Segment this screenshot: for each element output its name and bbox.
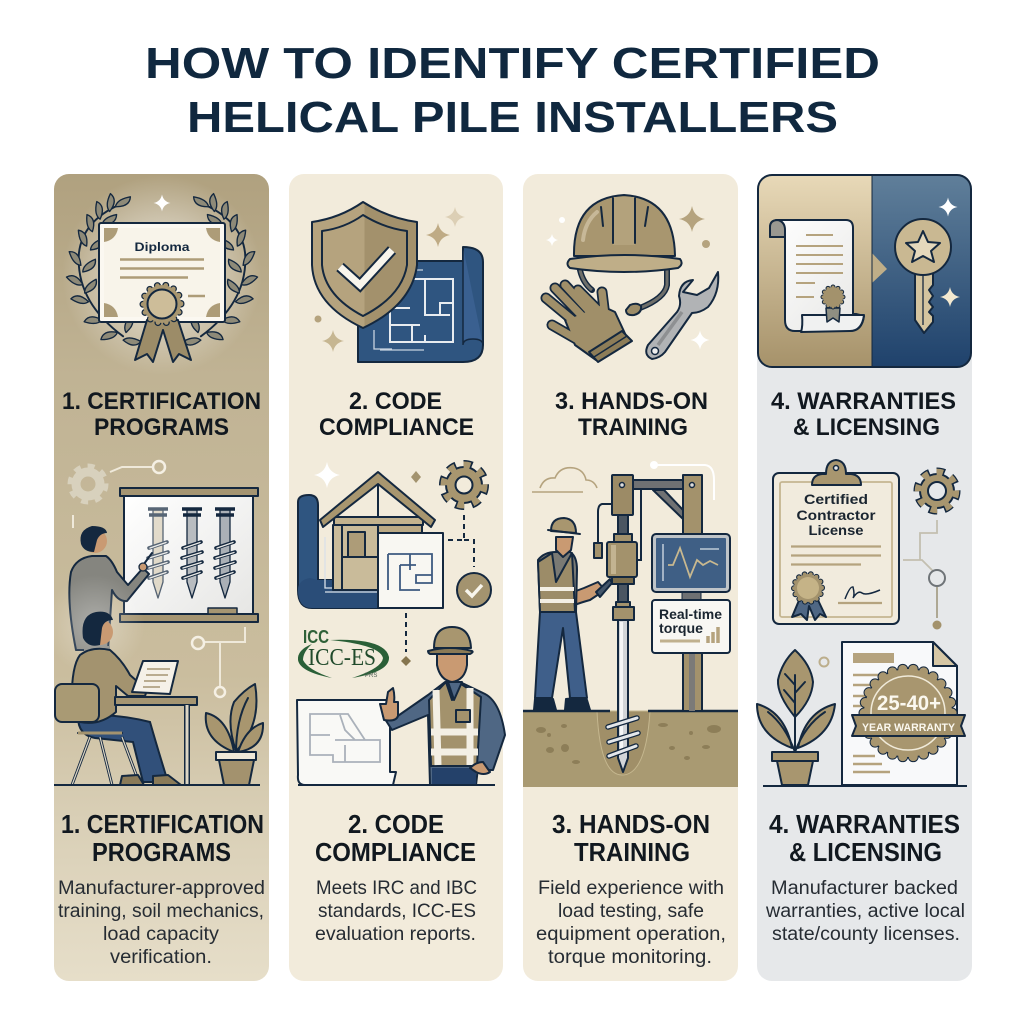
text: warranties description: Manufacturer backed xyxy=(771,878,958,899)
text: hands-on description: Field experience with xyxy=(538,878,724,899)
title: HOW TO IDENTIFY CERTIFIED xyxy=(145,39,880,88)
ground line xyxy=(54,784,260,786)
certified contractor license clipboard: License xyxy=(808,523,864,538)
ICC-ES logo: ICC-ES xyxy=(308,645,376,671)
heading: code bottom: COMPLIANCE xyxy=(315,837,476,867)
heading: code bottom: 2. CODE xyxy=(348,809,444,839)
text: hands-on description: equipment operation, xyxy=(536,924,726,945)
heading: code top xyxy=(319,388,474,441)
worker with controller xyxy=(534,518,612,710)
text: warranties description: state/county licenses. xyxy=(772,924,960,945)
panel: code compliance xyxy=(289,174,505,981)
heading: hands-on bottom xyxy=(552,809,710,867)
instructor figure xyxy=(69,526,152,660)
heading: code top: COMPLIANCE xyxy=(319,414,474,441)
title xyxy=(145,39,880,142)
icon: diploma with laurel wreath xyxy=(62,175,262,375)
pile: tan xyxy=(148,509,168,598)
text: certification description: Manufacturer-approved xyxy=(58,878,265,899)
certified contractor license clipboard xyxy=(773,460,899,624)
heading: certification top: 1. CERTIFICATION xyxy=(62,388,261,415)
heading: certification top: PROGRAMS xyxy=(94,414,229,441)
ICC-ES logo xyxy=(298,627,389,679)
text: warranties description xyxy=(765,878,965,945)
panel 3 background xyxy=(523,174,738,981)
helical pile rig xyxy=(594,475,702,772)
icon: shield with blueprint xyxy=(312,202,483,362)
icon: diploma with laurel wreath: Diploma xyxy=(134,240,190,254)
heading: hands-on top: TRAINING xyxy=(578,414,688,441)
whiteboard with helical piles xyxy=(120,488,258,622)
text: certification description: load capacity xyxy=(103,924,220,945)
text: hands-on description: torque monitoring. xyxy=(548,947,712,968)
panel 4 background xyxy=(757,174,972,981)
icon: potted plant xyxy=(206,684,263,785)
text: hands-on description xyxy=(536,878,726,968)
ICC-ES logo: PRS xyxy=(365,673,377,679)
worker with thumbs up xyxy=(380,627,505,785)
heading: hands-on bottom: 3. HANDS-ON xyxy=(552,809,710,839)
connector nodes xyxy=(192,627,245,697)
heading: warranties bottom: & LICENSING xyxy=(789,837,942,867)
icon: warranty scroll and key xyxy=(758,175,971,367)
real-time torque sign: torque xyxy=(659,620,703,636)
text: certification description: training, soil mechanics, xyxy=(58,901,264,922)
torque monitor xyxy=(652,534,730,602)
blueprint sheet xyxy=(297,700,396,785)
warranty badge: YEAR WARRANTY xyxy=(862,722,956,734)
heading: warranties top: 4. WARRANTIES xyxy=(771,388,956,415)
house on blueprint xyxy=(298,472,443,608)
panel: hands-on training xyxy=(523,174,738,981)
student at laptop xyxy=(45,575,197,785)
warranty document with badge xyxy=(842,642,965,785)
heading: warranties top: & LICENSING xyxy=(793,414,940,441)
ground line xyxy=(763,785,967,787)
text: code description xyxy=(315,878,477,945)
text: warranties description: warranties, active local xyxy=(765,901,965,922)
panel: certification programs xyxy=(45,174,269,981)
gear and dashed connector with check xyxy=(314,462,491,666)
heading: hands-on top xyxy=(555,388,708,441)
heading: warranties top xyxy=(771,388,956,441)
text: certification description: verification. xyxy=(110,947,212,968)
pile: gray two xyxy=(215,509,235,598)
icon: gear and connector xyxy=(72,461,165,528)
icon: potted plant xyxy=(757,650,835,785)
heading: code top: 2. CODE xyxy=(349,388,442,415)
heading: hands-on bottom: TRAINING xyxy=(574,837,690,867)
certified contractor license clipboard: Certified xyxy=(804,492,868,507)
real-time torque sign xyxy=(652,600,730,653)
cloud and connector xyxy=(532,461,714,500)
text: certification description xyxy=(58,878,265,968)
ICC-ES logo: ICC xyxy=(303,627,329,647)
certified contractor license clipboard: Contractor xyxy=(796,508,876,523)
heading: warranties bottom: 4. WARRANTIES xyxy=(769,809,960,839)
heading: certification bottom: PROGRAMS xyxy=(92,837,231,867)
soil ground with hole xyxy=(523,711,738,787)
ground line xyxy=(298,784,495,786)
panel: warranties and licensing xyxy=(757,174,972,981)
text: code description: standards, ICC-ES xyxy=(318,901,476,922)
heading: certification top xyxy=(62,388,261,441)
real-time torque sign: Real-time xyxy=(659,606,722,622)
title: HELICAL PILE INSTALLERS xyxy=(187,93,838,142)
heading: certification bottom: 1. CERTIFICATION xyxy=(61,809,264,839)
heading: hands-on top: 3. HANDS-ON xyxy=(555,388,708,415)
panel 1 background xyxy=(54,174,269,981)
heading: certification bottom xyxy=(61,809,264,867)
warranty badge: 25-40+ xyxy=(877,692,941,715)
text: code description: evaluation reports. xyxy=(315,924,476,945)
pile: gray one xyxy=(182,509,202,598)
text: code description: Meets IRC and IBC xyxy=(316,878,477,899)
heading: code bottom xyxy=(315,809,476,867)
text: hands-on description: load testing, safe xyxy=(558,901,704,922)
gear and network lines xyxy=(820,472,956,666)
icon: hard hat, gloves, wrench xyxy=(546,195,718,362)
warranty badge xyxy=(852,669,965,757)
panel 2 background xyxy=(289,174,503,981)
heading: warranties bottom xyxy=(769,809,960,867)
